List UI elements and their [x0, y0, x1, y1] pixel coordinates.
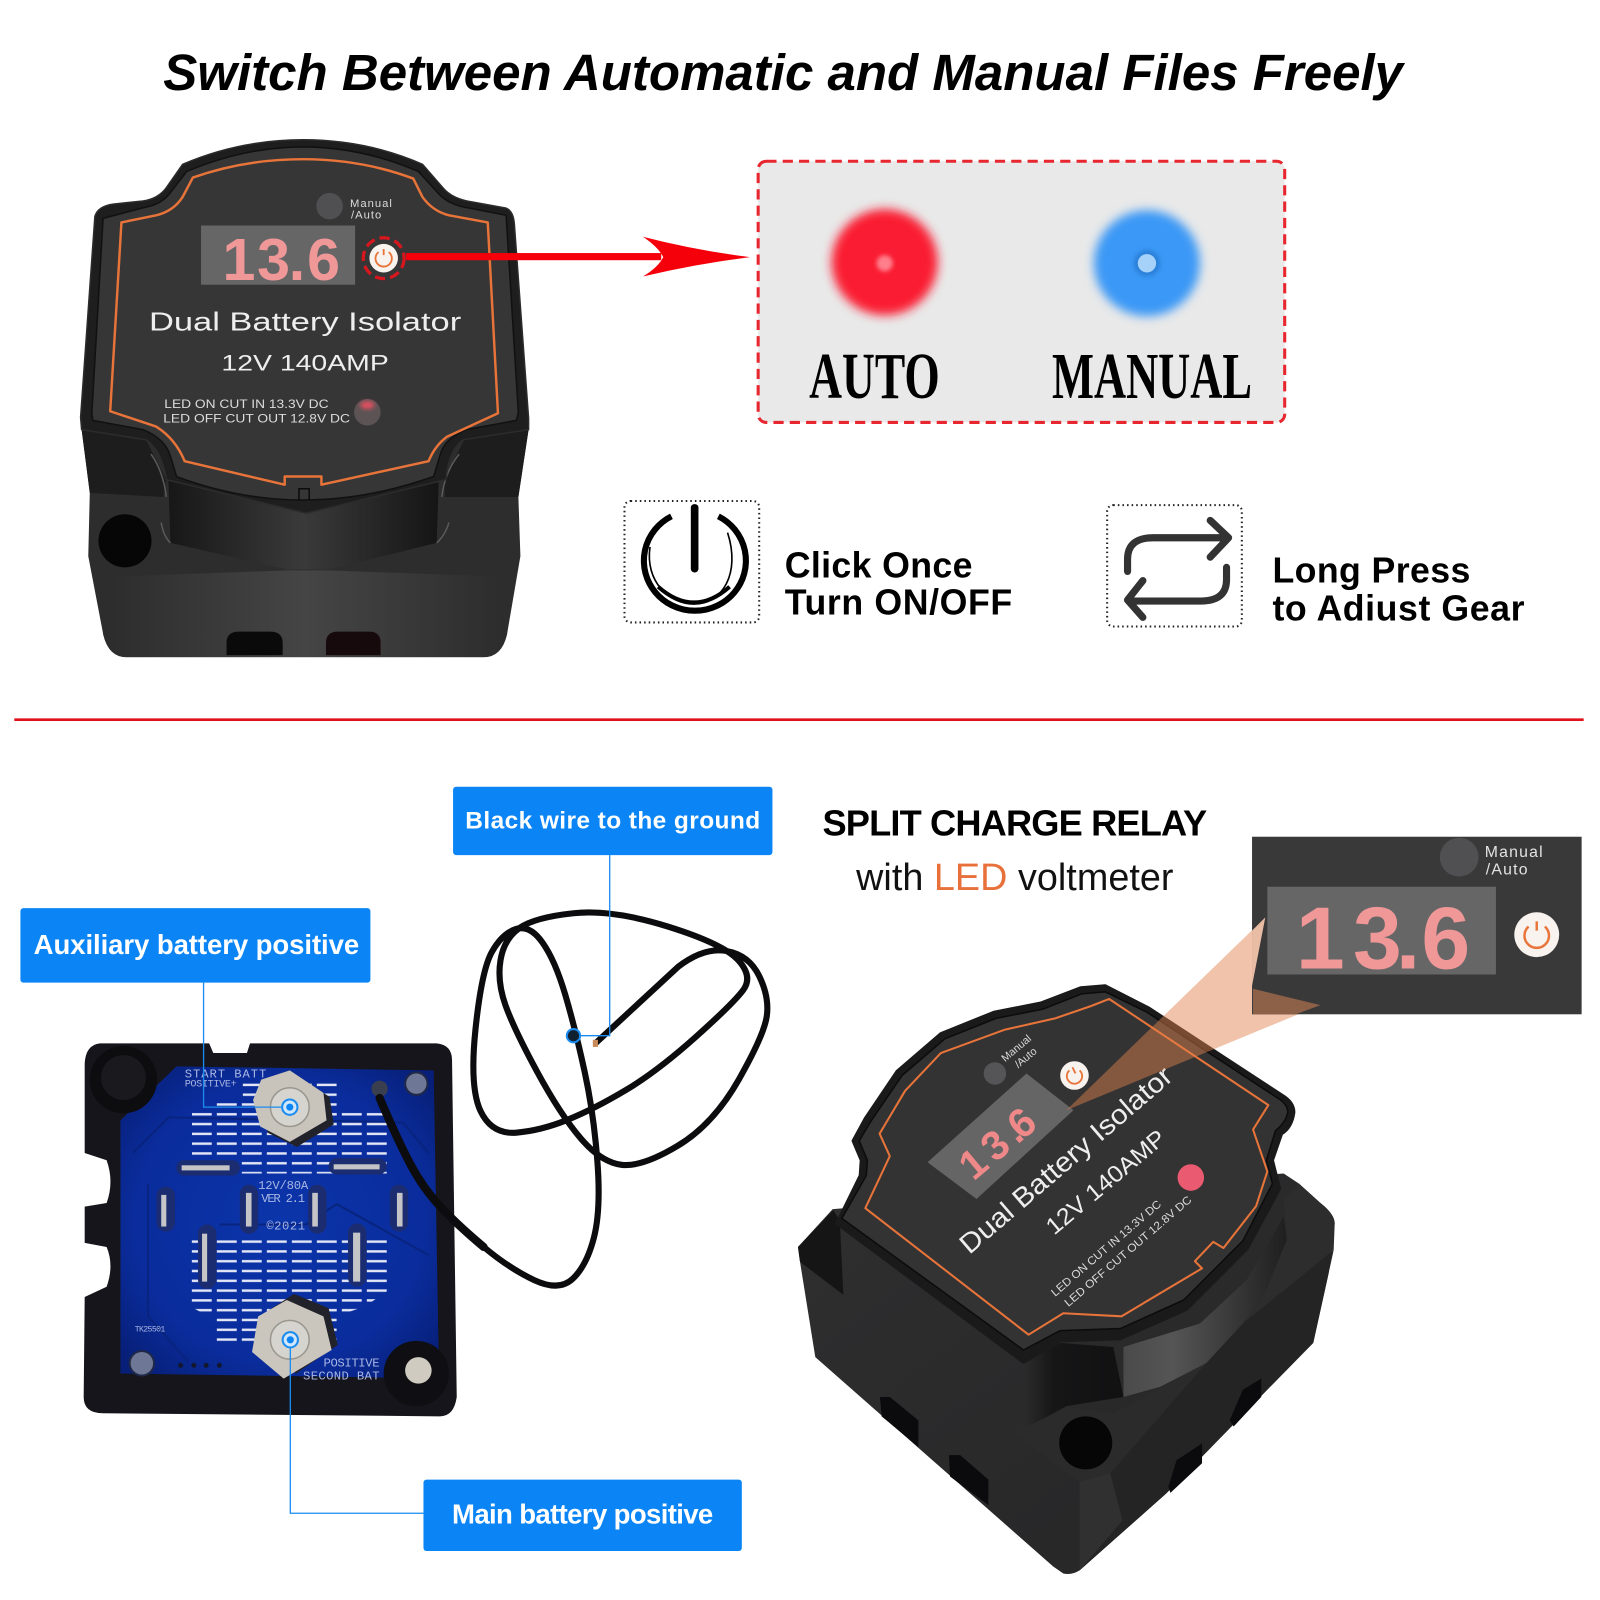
status LED — [1178, 1164, 1204, 1191]
LED notes — [163, 397, 350, 425]
voltage display — [201, 226, 355, 285]
right shoulder — [444, 430, 529, 497]
text: long press: Long Press — [1272, 551, 1470, 591]
product photo: angled isolator — [798, 986, 1335, 1574]
plate notch — [299, 489, 309, 500]
AUTO label: AUTO — [809, 341, 940, 413]
product name: Dual Battery Isolator — [149, 309, 462, 337]
text: long press: to Adiust Gear — [1272, 588, 1525, 628]
board print: ©2021 — [266, 1220, 305, 1234]
red auto indicator — [832, 209, 938, 315]
inset: display close-up — [1252, 837, 1582, 1014]
rating: 12V 140AMP — [221, 350, 389, 375]
collar under plate — [168, 480, 439, 569]
heading: split charge relay: SPLIT CHARGE RELAY — [822, 803, 1207, 844]
blue circuit board — [120, 1066, 439, 1378]
subheading: with LED voltmeter: with LED voltmeter — [855, 856, 1173, 898]
orange outline — [110, 159, 498, 485]
corner post top left — [90, 1046, 157, 1113]
leader line: main — [283, 1332, 423, 1513]
leader line: auxiliary — [204, 983, 297, 1115]
red arrow to panel — [406, 237, 750, 277]
board print: VER 2.1 — [261, 1192, 305, 1206]
solder blob — [371, 1081, 388, 1097]
left corner recess — [798, 1210, 843, 1295]
front corner highlight — [1080, 1473, 1122, 1570]
board traces — [133, 1117, 429, 1362]
shoulder highlights — [151, 454, 459, 543]
board print — [135, 1068, 380, 1384]
board print: SECOND BAT — [303, 1370, 380, 1384]
display window — [928, 1073, 1073, 1199]
voltage reading: 13.6 — [1296, 889, 1470, 987]
power button — [1060, 1061, 1089, 1090]
lower housing — [82, 430, 529, 657]
title: Switch Between Automatic and Manual Files Freely — [163, 44, 1406, 101]
vent slots upper — [190, 1080, 390, 1176]
button label: /Auto — [351, 209, 382, 221]
beam overlap lower — [1253, 989, 1320, 1014]
lower terminal nut — [252, 1294, 338, 1379]
button label: /Auto — [1013, 1045, 1039, 1071]
corner post bottom right — [384, 1341, 449, 1406]
text: click once: Click Once — [785, 546, 972, 586]
orange outline — [865, 999, 1268, 1335]
label: main battery positive: Main battery positive — [452, 1498, 713, 1529]
dark corner tower — [1023, 1343, 1123, 1430]
icon: cycle arrows in dotted box — [1107, 505, 1242, 627]
upper terminal nut — [253, 1070, 334, 1147]
mode button — [316, 193, 343, 219]
outer plate rim — [81, 140, 529, 513]
button label: Manual — [350, 198, 393, 210]
black housing — [84, 1043, 457, 1416]
black wire — [380, 912, 767, 1286]
product name: Dual Battery Isolator — [953, 1060, 1178, 1260]
status LED — [354, 399, 381, 426]
power button — [1514, 912, 1559, 957]
vent slots lower — [190, 1237, 390, 1347]
mounting hole — [98, 514, 152, 567]
text: click once: Turn ON/OFF — [785, 582, 1012, 622]
voltage reading: 13.6 — [222, 226, 340, 293]
top plate — [842, 992, 1288, 1350]
rating: 12V 140AMP — [1041, 1125, 1171, 1240]
terminal slot left — [227, 632, 283, 655]
button label: Manual — [999, 1033, 1034, 1065]
terminal slot right — [326, 632, 381, 655]
label: auxiliary battery positive — [20, 908, 370, 983]
board print: POSITIVE — [323, 1356, 380, 1370]
product photo: top view of isolator — [81, 140, 529, 657]
mode button — [1440, 838, 1479, 877]
LED notes: LED OFF CUT OUT 12.8V DC — [163, 411, 350, 425]
label: black wire to the ground — [453, 787, 772, 855]
board print: 12V/80A — [258, 1179, 309, 1193]
right shoulder — [1243, 1184, 1335, 1323]
body silhouette — [798, 1173, 1335, 1574]
blue manual indicator — [1094, 210, 1200, 316]
board print: TK25501 — [135, 1326, 165, 1335]
terminal slots — [880, 1379, 1261, 1505]
LED notes: LED ON CUT IN 13.3V DC — [164, 397, 329, 411]
board print: POSITIVE+ — [185, 1080, 237, 1091]
LED notes: LED ON CUT IN 13.3V DC — [1049, 1198, 1164, 1299]
button label: Manual — [1485, 844, 1544, 861]
solder lines — [161, 1164, 403, 1282]
beam overlap upper — [1252, 917, 1265, 986]
voltage reading: 13.6 — [950, 1098, 1045, 1189]
mounting hole — [1059, 1416, 1112, 1469]
lit collar — [1123, 1216, 1287, 1397]
front face — [103, 570, 507, 657]
ledge around hole — [1013, 1363, 1206, 1482]
plate rim — [837, 986, 1294, 1362]
board openings — [157, 1158, 408, 1289]
button label: /Auto — [1486, 861, 1529, 878]
board print: START BATT — [185, 1068, 266, 1082]
label: black wire to the ground: Black wire to the ground — [465, 808, 760, 835]
product photo: opened circuit board — [84, 1043, 457, 1416]
top plate — [92, 147, 518, 500]
right lower face — [1080, 1250, 1334, 1570]
zoom beam — [1066, 917, 1320, 1110]
icon: power symbol in dotted box — [624, 501, 759, 622]
contact pins — [178, 1363, 222, 1368]
label: main battery positive — [423, 1480, 742, 1551]
label: auxiliary battery positive: Auxiliary battery positive — [34, 929, 359, 960]
display window — [1267, 887, 1496, 974]
panel: auto and manual indicator — [758, 161, 1285, 422]
red divider — [14, 718, 1584, 721]
power button — [363, 238, 404, 279]
mode button — [984, 1062, 1006, 1085]
screws — [130, 1072, 428, 1376]
LED notes: LED OFF CUT OUT 12.8V DC — [1063, 1194, 1194, 1309]
MANUAL label: MANUAL — [1052, 341, 1252, 413]
left shoulder — [82, 430, 166, 497]
wire copper tip — [593, 1040, 598, 1047]
leader line: black wire — [567, 855, 610, 1042]
